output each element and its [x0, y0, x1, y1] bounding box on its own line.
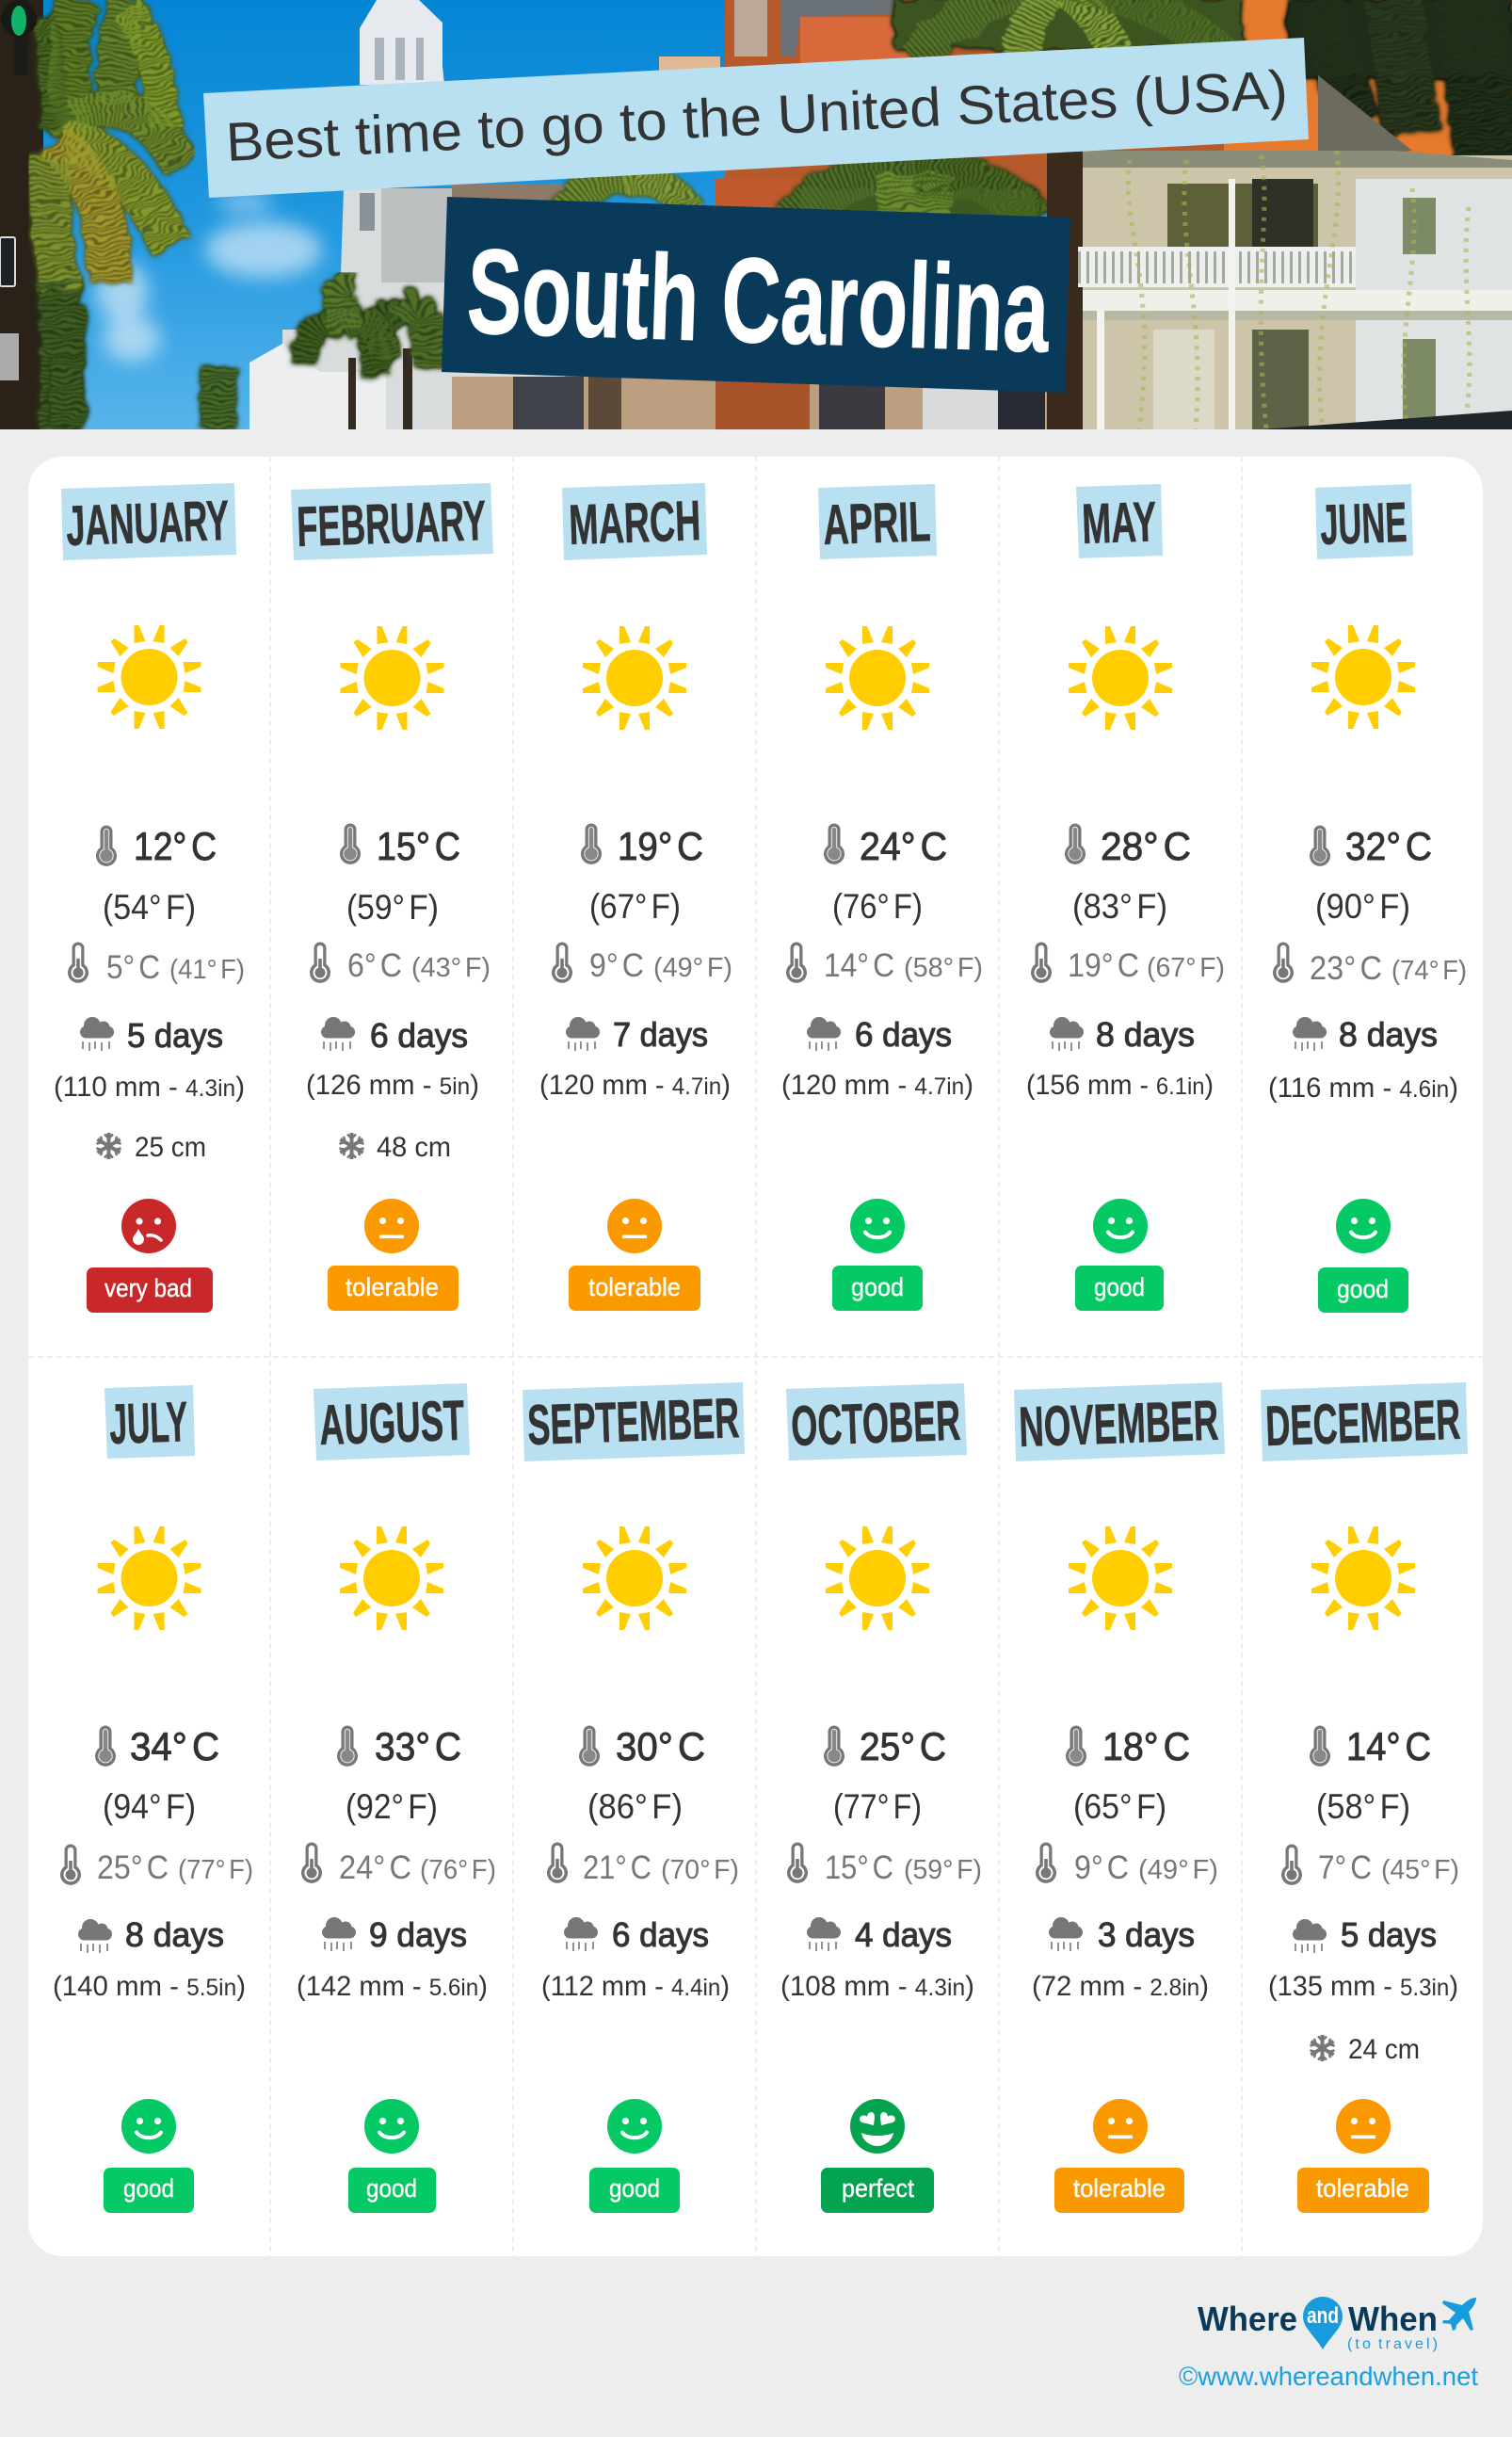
- rainfall: (135 mm - 5.3in): [1268, 1971, 1458, 2002]
- rating: good: good: [123, 2174, 174, 2203]
- low temperature: [1036, 1842, 1218, 1886]
- high temperature: [337, 1724, 461, 1768]
- icon: sun: [583, 1526, 686, 1630]
- icon: good face: [1336, 1199, 1391, 1253]
- rainfall: (110 mm - 4.3in): [54, 1072, 245, 1103]
- icon: sun: [826, 626, 929, 730]
- rating: good: [589, 2168, 680, 2213]
- title block: South Carolina: South Carolina: [465, 224, 1052, 378]
- icon: tolerable face: [364, 1199, 419, 1253]
- low temperature: [1031, 942, 1225, 984]
- rainfall: (142 mm - 5.6in): [297, 1971, 488, 2002]
- snowfall: 25 cm: [135, 1132, 206, 1163]
- rainy days: 8 days: [125, 1915, 224, 1954]
- logo: Where and When: and: [1307, 2303, 1339, 2329]
- low temperature: (41° F): [169, 955, 245, 985]
- month heading: January: JANUARY: [65, 489, 230, 557]
- high temperature: [1310, 824, 1432, 868]
- rainfall: (120 mm - 4.7in): [781, 1070, 973, 1101]
- low temperature: 25° C: [97, 1849, 169, 1886]
- low temperature: (76° F): [420, 1855, 496, 1885]
- icon: sun: [826, 1526, 929, 1630]
- icon: tolerable face: [1336, 2099, 1391, 2154]
- panel: March: [539, 483, 732, 1311]
- rainy days: 5 days: [1341, 1915, 1437, 1954]
- website credit: ©www.whereandwhen.net: [1179, 2362, 1478, 2391]
- low temperature: (49° F): [653, 953, 732, 983]
- title ribbon: Best time to go: [203, 38, 1309, 198]
- low temperature: [787, 1842, 982, 1886]
- rainy days: 8 days: [1339, 1015, 1438, 1054]
- high temperature: 28° C: [1101, 824, 1191, 868]
- header photo: Charleston street with palm trees: [0, 0, 1512, 429]
- high temperature in Fahrenheit: (58° F): [1316, 1787, 1410, 1826]
- high temperature: 32° C: [1345, 824, 1432, 868]
- high temperature in Fahrenheit: (67° F): [589, 887, 681, 926]
- icon: sun: [583, 626, 686, 730]
- column and row dividers: [28, 457, 1483, 2256]
- rating: good: [1075, 1266, 1164, 1311]
- high temperature: [96, 824, 217, 868]
- high temperature: [579, 1724, 705, 1768]
- rainy days: 6 days: [370, 1016, 468, 1055]
- snowfall: [338, 1132, 451, 1163]
- month heading: April: APRIL: [822, 490, 931, 557]
- month heading: November: NOVEMBER: [1018, 1389, 1219, 1459]
- month heading: November: [1014, 1382, 1225, 1461]
- low temperature: [301, 1842, 496, 1886]
- low temperature: [1281, 1844, 1459, 1886]
- rainy days: [807, 1015, 952, 1054]
- panel: August: [297, 1383, 496, 2213]
- logo: Where and When: When: [1348, 2300, 1438, 2338]
- rainy days: 8 days: [1096, 1015, 1195, 1054]
- low temperature: (59° F): [904, 1855, 982, 1885]
- low temperature: [786, 942, 983, 984]
- month heading: March: [562, 483, 707, 560]
- low temperature: (77° F): [178, 1855, 253, 1885]
- month heading: June: [1315, 484, 1413, 559]
- high temperature in Fahrenheit: (86° F): [587, 1787, 683, 1826]
- rainy days: [1293, 1915, 1437, 1954]
- high temperature: [581, 823, 703, 868]
- snowfall: 48 cm: [377, 1132, 451, 1163]
- panel: February: [291, 483, 493, 1311]
- rating: good: [104, 2168, 194, 2213]
- rainfall: (126 mm - 5in): [306, 1070, 479, 1101]
- rating: tolerable: tolerable: [1073, 2174, 1166, 2203]
- month heading: September: SEPTEMBER: [526, 1386, 740, 1457]
- low temperature: (45° F): [1381, 1855, 1459, 1885]
- rainy days: 6 days: [855, 1015, 952, 1054]
- rating: good: [348, 2168, 436, 2213]
- high temperature: [824, 1724, 946, 1768]
- month heading: March: MARCH: [568, 489, 701, 557]
- rainfall: (72 mm - 2.8in): [1032, 1971, 1209, 2002]
- low temperature: 9° C: [1074, 1849, 1129, 1886]
- low temperature: 21° C: [583, 1849, 651, 1886]
- low temperature: [310, 942, 491, 984]
- high temperature: 34° C: [130, 1724, 219, 1768]
- rainy days: [80, 1016, 223, 1055]
- rainy days: [322, 1915, 467, 1954]
- month heading: January: [61, 483, 236, 560]
- rainy days: 4 days: [855, 1915, 952, 1954]
- low temperature: [68, 942, 245, 986]
- icon: sun: [98, 1526, 201, 1630]
- icon: sun: [1069, 626, 1172, 730]
- icon: good face: [121, 2099, 176, 2154]
- rating: good: good: [366, 2174, 417, 2203]
- icon: tolerable face: [1093, 2099, 1148, 2154]
- rainy days: 7 days: [613, 1015, 708, 1054]
- rainy days: [1050, 1015, 1195, 1054]
- high temperature: 18° C: [1102, 1724, 1190, 1768]
- panel: October: [780, 1383, 982, 2213]
- high temperature: [824, 823, 947, 868]
- month heading: July: JULY: [108, 1390, 188, 1456]
- icon: very bad face: [121, 1199, 176, 1253]
- icon: good face: [1093, 1199, 1148, 1253]
- low temperature: 23° C: [1310, 950, 1382, 987]
- rainy days: [321, 1016, 468, 1055]
- high temperature: 15° C: [377, 824, 460, 868]
- panel: January: [54, 483, 245, 1313]
- icon: sun: [1311, 1526, 1415, 1630]
- high temperature: 12° C: [134, 824, 217, 868]
- icon: sun: [1069, 1526, 1172, 1630]
- logo: Where and When: Where: [1198, 2300, 1297, 2338]
- logo: Where and When: [1198, 2297, 1476, 2352]
- snowfall: 24 cm: [1348, 2034, 1420, 2065]
- rating: good: [832, 1266, 923, 1311]
- rating: very bad: [87, 1267, 213, 1313]
- high temperature in Fahrenheit: (76° F): [832, 887, 923, 926]
- snowfall: [1309, 2034, 1420, 2065]
- icon: airplane: [1442, 2298, 1476, 2331]
- icon: map pin: [1303, 2297, 1343, 2349]
- low temperature: 19° C: [1068, 947, 1139, 984]
- month heading: August: AUGUST: [318, 1389, 465, 1457]
- rating: very bad: very bad: [105, 1274, 192, 1302]
- low temperature: [60, 1844, 253, 1886]
- panel: November: [1014, 1382, 1225, 2213]
- high temperature: [1066, 1724, 1190, 1768]
- rating: tolerable: tolerable: [346, 1273, 439, 1301]
- low temperature: 24° C: [339, 1849, 411, 1886]
- panel: June: [1268, 484, 1467, 1313]
- rating: good: good: [1094, 1273, 1145, 1301]
- high temperature in Fahrenheit: (59° F): [346, 888, 439, 927]
- logo: Where and When: (to travel): [1347, 2336, 1438, 2352]
- rating: perfect: [821, 2168, 934, 2213]
- rainfall: (116 mm - 4.6in): [1268, 1073, 1458, 1104]
- rating: good: good: [851, 1273, 904, 1301]
- rainfall: (140 mm - 5.5in): [53, 1971, 246, 2002]
- rainy days: [1293, 1015, 1438, 1054]
- low temperature: 5° C: [106, 949, 160, 986]
- high temperature in Fahrenheit: (90° F): [1315, 887, 1410, 926]
- rainy days: [78, 1915, 224, 1954]
- rating: tolerable: [1054, 2168, 1184, 2213]
- high temperature: [340, 823, 460, 868]
- rainy days: [566, 1015, 708, 1054]
- rainy days: [564, 1915, 709, 1954]
- high temperature: 25° C: [860, 1724, 946, 1768]
- low temperature: (70° F): [661, 1855, 739, 1885]
- low temperature: (49° F): [1138, 1855, 1218, 1885]
- rating: tolerable: [569, 1266, 700, 1311]
- panel: July: [53, 1385, 253, 2213]
- high temperature in Fahrenheit: (94° F): [103, 1787, 196, 1826]
- rainy days: 9 days: [369, 1915, 467, 1954]
- month heading: February: FEBRUARY: [296, 489, 487, 558]
- month heading: August: [314, 1383, 470, 1461]
- icon: good face: [850, 1199, 905, 1253]
- low temperature: [547, 1842, 739, 1886]
- low temperature: 14° C: [824, 947, 894, 984]
- rainy days: [807, 1915, 952, 1954]
- month heading: October: OCTOBER: [790, 1389, 961, 1458]
- low temperature: 6° C: [347, 947, 402, 984]
- rating: good: good: [1337, 1275, 1389, 1303]
- low temperature: (43° F): [411, 953, 491, 983]
- month heading: May: MAY: [1081, 490, 1157, 556]
- panel: April: [781, 484, 983, 1311]
- high temperature: 30° C: [616, 1724, 705, 1768]
- rating: tolerable: [1297, 2168, 1429, 2213]
- low temperature: (58° F): [904, 953, 983, 983]
- month heading: July: [105, 1385, 195, 1459]
- high temperature: [1065, 823, 1191, 868]
- low temperature: [552, 942, 732, 984]
- title ribbon: Best time to go: Best time to go to the United States (USA): [224, 59, 1289, 173]
- high temperature in Fahrenheit: (92° F): [346, 1787, 438, 1826]
- high temperature in Fahrenheit: (83° F): [1072, 887, 1167, 926]
- icon: good face: [607, 2099, 662, 2154]
- high temperature: 24° C: [860, 824, 947, 868]
- high temperature: [95, 1724, 219, 1768]
- high temperature in Fahrenheit: (65° F): [1073, 1787, 1166, 1826]
- month heading: June: JUNE: [1319, 491, 1407, 557]
- icon: good face: [364, 2099, 419, 2154]
- high temperature: [1310, 1724, 1431, 1768]
- snowfall: [95, 1132, 206, 1163]
- high temperature in Fahrenheit: (54° F): [103, 888, 196, 927]
- icon: sun: [341, 626, 444, 730]
- high temperature: 14° C: [1346, 1724, 1431, 1768]
- rating: perfect: perfect: [842, 2174, 914, 2203]
- high temperature: 33° C: [375, 1724, 461, 1768]
- rainy days: 3 days: [1098, 1915, 1195, 1954]
- month heading: April: [818, 484, 937, 559]
- icon: sun: [1311, 625, 1415, 729]
- rainy days: 6 days: [612, 1915, 709, 1954]
- icon: sun: [340, 1526, 443, 1630]
- month heading: October: [786, 1383, 967, 1461]
- rating: tolerable: tolerable: [1316, 2174, 1409, 2203]
- rainfall: (112 mm - 4.4in): [541, 1971, 730, 2002]
- low temperature: (74° F): [1391, 956, 1467, 986]
- high temperature in Fahrenheit: (77° F): [833, 1787, 922, 1826]
- rating: tolerable: [328, 1266, 458, 1311]
- rainfall: (156 mm - 6.1in): [1026, 1070, 1214, 1101]
- low temperature: (67° F): [1147, 953, 1225, 983]
- icon: perfect face: [850, 2099, 905, 2154]
- month heading: May: [1076, 484, 1163, 558]
- month heading: February: [291, 483, 493, 560]
- rating: good: good: [609, 2174, 660, 2203]
- rainy days: 5 days: [127, 1016, 223, 1055]
- rating: good: [1318, 1267, 1408, 1313]
- main white panel: [28, 457, 1483, 2256]
- high temperature: 19° C: [618, 824, 703, 868]
- low temperature: 9° C: [589, 947, 644, 984]
- rainfall: (108 mm - 4.3in): [780, 1971, 974, 2002]
- rainy days: [1049, 1915, 1195, 1954]
- title block: South Carolina: [442, 197, 1070, 393]
- rating: tolerable: tolerable: [588, 1273, 681, 1301]
- rainfall: (120 mm - 4.7in): [539, 1070, 731, 1101]
- panel: December: [1261, 1382, 1468, 2213]
- icon: tolerable face: [607, 1199, 662, 1253]
- month heading: September: [523, 1382, 745, 1461]
- low temperature: 15° C: [825, 1849, 893, 1886]
- panel: May: [1026, 484, 1225, 1311]
- panel: September: [523, 1382, 745, 2213]
- icon: sun: [98, 625, 201, 729]
- low temperature: 7° C: [1318, 1849, 1372, 1886]
- low temperature: [1273, 942, 1467, 987]
